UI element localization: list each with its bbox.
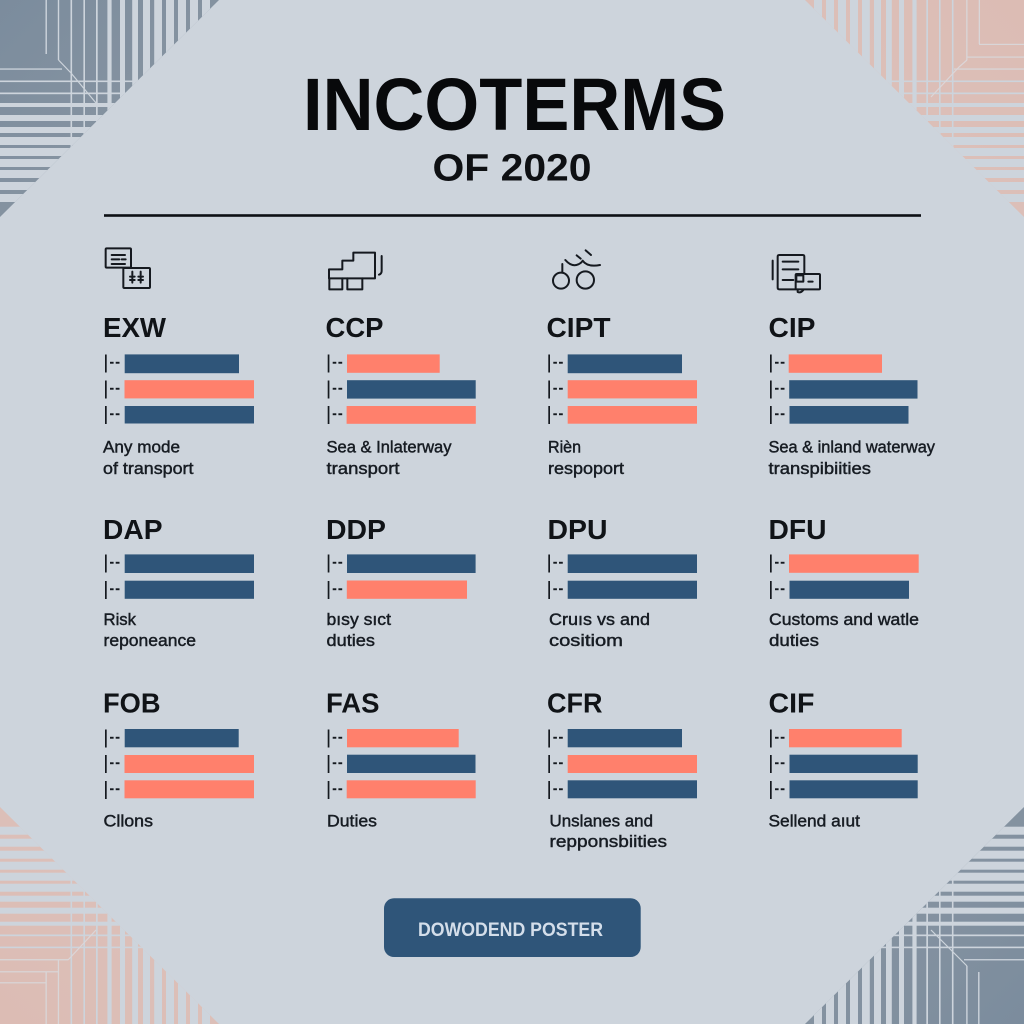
description: CCP: transport bbox=[326, 459, 400, 478]
description: DDP bbox=[326, 610, 391, 650]
description: CIPT: Rièn bbox=[548, 438, 581, 456]
description: DAP: Risk bbox=[104, 610, 136, 629]
description: FOB: Cllons bbox=[104, 812, 153, 831]
bars: CIF bbox=[770, 729, 918, 799]
description: CIP: transpibiities bbox=[768, 459, 871, 478]
description: DAP bbox=[104, 610, 196, 650]
decorative corner: bottom right bbox=[804, 804, 1024, 1024]
card: DFU bbox=[768, 514, 919, 650]
description: FAS: Duties bbox=[327, 812, 377, 831]
icon: stepped cargo box bbox=[329, 253, 382, 289]
card: FOB: FOB bbox=[103, 688, 160, 719]
bars: CCP bbox=[328, 354, 476, 424]
bars: DDP bbox=[328, 554, 476, 599]
bars: DFU bbox=[770, 554, 919, 599]
description: DPU bbox=[549, 610, 650, 650]
description: EXW: Any mode bbox=[103, 438, 180, 456]
description: DPU: Cruıs vs and bbox=[549, 610, 650, 629]
bars: CIPT bbox=[548, 354, 697, 424]
icon: document and card bbox=[773, 255, 820, 292]
bars: FOB bbox=[105, 729, 254, 799]
description: CIPT: respoport bbox=[548, 459, 624, 478]
description: CFR: Unslanes and bbox=[550, 812, 653, 831]
description: EXW: of transport bbox=[103, 459, 194, 478]
decorative corner: bottom left bbox=[0, 804, 220, 1024]
card: FOB bbox=[103, 688, 254, 831]
bars: FAS bbox=[328, 729, 476, 799]
description: DPU: cositiom bbox=[549, 631, 623, 650]
card: CIF: CIF bbox=[768, 688, 814, 719]
card: EXW: EXW bbox=[103, 312, 167, 343]
card: CFR bbox=[547, 688, 697, 851]
bars: CFR bbox=[548, 729, 697, 799]
card: CFR: CFR bbox=[547, 688, 602, 719]
description: CFR bbox=[550, 812, 667, 851]
decorative corner: top left bbox=[0, 0, 220, 220]
subtitle: OF 2020 bbox=[432, 148, 592, 190]
description: CIP bbox=[768, 438, 935, 478]
card: DFU: DFU bbox=[768, 514, 826, 545]
card: CIPT bbox=[546, 312, 697, 478]
card: DDP: DDP bbox=[326, 514, 386, 545]
card: CIPT: CIPT bbox=[546, 312, 610, 343]
title: INCOTERMS bbox=[303, 63, 726, 146]
card: CCP: CCP bbox=[326, 312, 384, 343]
description: DAP: reponeance bbox=[104, 631, 196, 650]
bars: EXW bbox=[105, 354, 254, 424]
description: CCP: Sea & Inlaterway bbox=[326, 438, 452, 456]
card: EXW bbox=[103, 312, 254, 478]
description: CFR: repponsbiities bbox=[550, 832, 667, 851]
card: CIP bbox=[768, 312, 935, 478]
card: FAS bbox=[326, 688, 476, 831]
description: DFU: Customs and watle bbox=[769, 610, 919, 629]
button: download poster bbox=[384, 898, 641, 957]
icon: wheels and waves bbox=[553, 250, 600, 289]
bars: DAP bbox=[105, 554, 254, 599]
card: CIF bbox=[768, 688, 918, 831]
description: CCP bbox=[326, 438, 452, 478]
card: FAS: FAS bbox=[326, 688, 380, 719]
description: EXW bbox=[103, 438, 194, 478]
card: CCP bbox=[326, 312, 476, 478]
title divider bbox=[104, 214, 921, 217]
description: DFU: duties bbox=[769, 631, 819, 650]
description: DDP: bısy sıct bbox=[326, 610, 391, 629]
description: DFU bbox=[769, 610, 919, 650]
description: CIP: Sea & inland waterway bbox=[768, 438, 935, 456]
card: DAP: DAP bbox=[103, 514, 162, 545]
card: DDP bbox=[326, 514, 476, 650]
card: CIP: CIP bbox=[768, 312, 816, 343]
icon: documents and abacus bbox=[106, 248, 150, 288]
card: DPU bbox=[548, 514, 697, 650]
bars: CIP bbox=[770, 354, 918, 424]
description: CIPT bbox=[548, 438, 624, 478]
button: download poster: DOWODEND POSTER bbox=[418, 919, 603, 941]
bars: DPU bbox=[548, 554, 697, 599]
card: DAP bbox=[103, 514, 254, 650]
card: DPU: DPU bbox=[548, 514, 608, 545]
description: CIF: Sellend aıut bbox=[768, 812, 860, 831]
description: DDP: duties bbox=[326, 631, 375, 650]
decorative corner: top right bbox=[804, 0, 1024, 220]
